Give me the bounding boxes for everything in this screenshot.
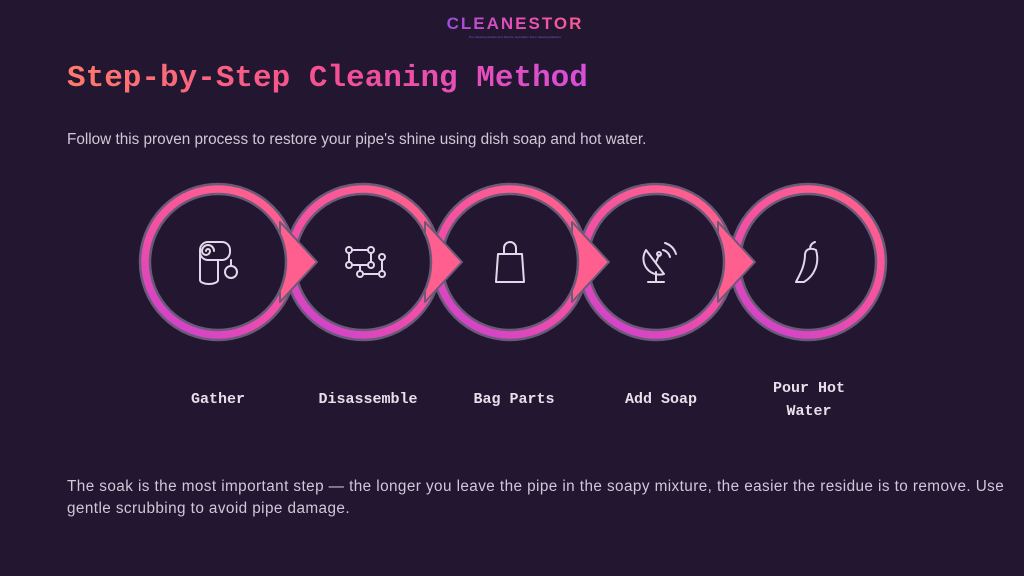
intro text: Follow this proven process to restore your pipe's shine using dish soap and hot water. bbox=[67, 131, 646, 148]
closing text bbox=[67, 478, 1004, 517]
step 5 circle bbox=[730, 184, 886, 340]
icon: roll bbox=[200, 242, 237, 284]
logo: CLEANESTOR bbox=[447, 14, 583, 33]
closing text: The soak is the most important step — the longer you leave the pipe in the soapy mixture, the easier the residue is to remove. Use bbox=[67, 478, 1004, 495]
step 3 circle bbox=[432, 184, 609, 340]
step 4 circle bbox=[578, 184, 755, 340]
icon: satellite dish bbox=[643, 243, 676, 282]
logo: Pro Cleaning Guides And Service Journalism From Cleaning Masters bbox=[469, 35, 561, 39]
title: Step-by-Step Cleaning Method bbox=[67, 61, 588, 96]
label: Pour Hot Water: Water bbox=[786, 403, 832, 420]
label: Gather: Gather bbox=[191, 391, 245, 408]
label: Pour Hot Water bbox=[773, 380, 845, 420]
step 2 circle bbox=[285, 184, 462, 340]
label: Pour Hot Water: Pour Hot bbox=[773, 380, 845, 397]
icon: bag bbox=[496, 242, 524, 282]
label: Disassemble: Disassemble bbox=[318, 391, 418, 408]
label: Add Soap: Add Soap bbox=[625, 391, 697, 408]
label: Bag Parts: Bag Parts bbox=[473, 391, 554, 408]
step 1 circle bbox=[140, 184, 317, 340]
icon: chili bbox=[796, 242, 817, 282]
closing text: gentle scrubbing to avoid pipe damage. bbox=[67, 500, 350, 517]
icon: diagram bbox=[346, 247, 385, 277]
